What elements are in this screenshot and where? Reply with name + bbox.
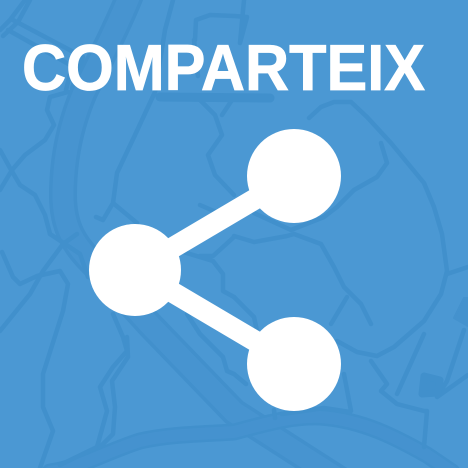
connector: upper: [135, 176, 294, 270]
main road at the bottom: [50, 417, 452, 468]
river band: [63, 0, 340, 468]
icon: share symbol: [89, 129, 341, 411]
node: top right: [247, 129, 341, 223]
settlement block: [422, 376, 440, 394]
node: left: [89, 224, 181, 316]
connector: lower: [135, 270, 294, 364]
node: bottom right: [247, 317, 341, 411]
title: COMPARTEIX: [22, 31, 425, 104]
dark strip under the title: [160, 97, 270, 98]
building at right edge: [454, 298, 468, 326]
